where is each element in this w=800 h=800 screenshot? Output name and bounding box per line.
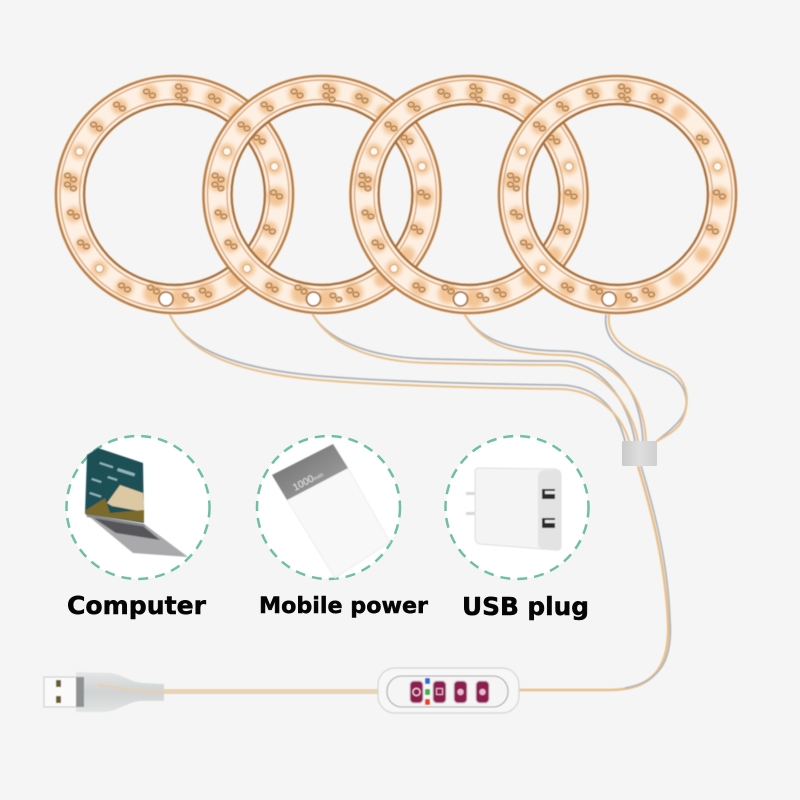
icon: power bank — [272, 444, 390, 578]
timer button — [433, 681, 446, 703]
USB translucent housing — [76, 672, 164, 712]
mobile power dashed circle — [257, 436, 400, 579]
icon: USB wall plug — [466, 468, 561, 550]
LED ring 3 — [350, 76, 588, 313]
mobile power panel — [257, 436, 400, 579]
cable from USB connector to controller — [160, 689, 380, 694]
indicator lights — [425, 678, 430, 705]
USB metal tip — [44, 677, 77, 707]
label: USB plug: USB plug — [462, 592, 589, 621]
mode button — [454, 681, 467, 703]
LED ring 4 — [499, 76, 736, 313]
cable splitter clip — [622, 441, 657, 466]
inline controller — [378, 668, 519, 713]
wire from splitter to controller — [518, 466, 670, 690]
LED ring 1 — [56, 76, 293, 313]
computer panel — [66, 436, 210, 579]
wires from rings to splitter — [170, 315, 687, 441]
label: Mobile power: Mobile power — [259, 593, 428, 619]
dimmer button — [476, 681, 489, 703]
LED ring 2 — [204, 76, 440, 313]
power button — [410, 681, 423, 703]
USB connector — [44, 672, 164, 712]
icon: laptop — [85, 448, 188, 557]
label: Computer: Computer — [67, 591, 207, 620]
icon: power bank: 1000mAh — [291, 469, 325, 494]
controller body — [378, 668, 519, 713]
computer dashed circle — [66, 436, 210, 579]
USB plug dashed circle — [446, 436, 588, 579]
USB plug panel — [446, 436, 588, 579]
